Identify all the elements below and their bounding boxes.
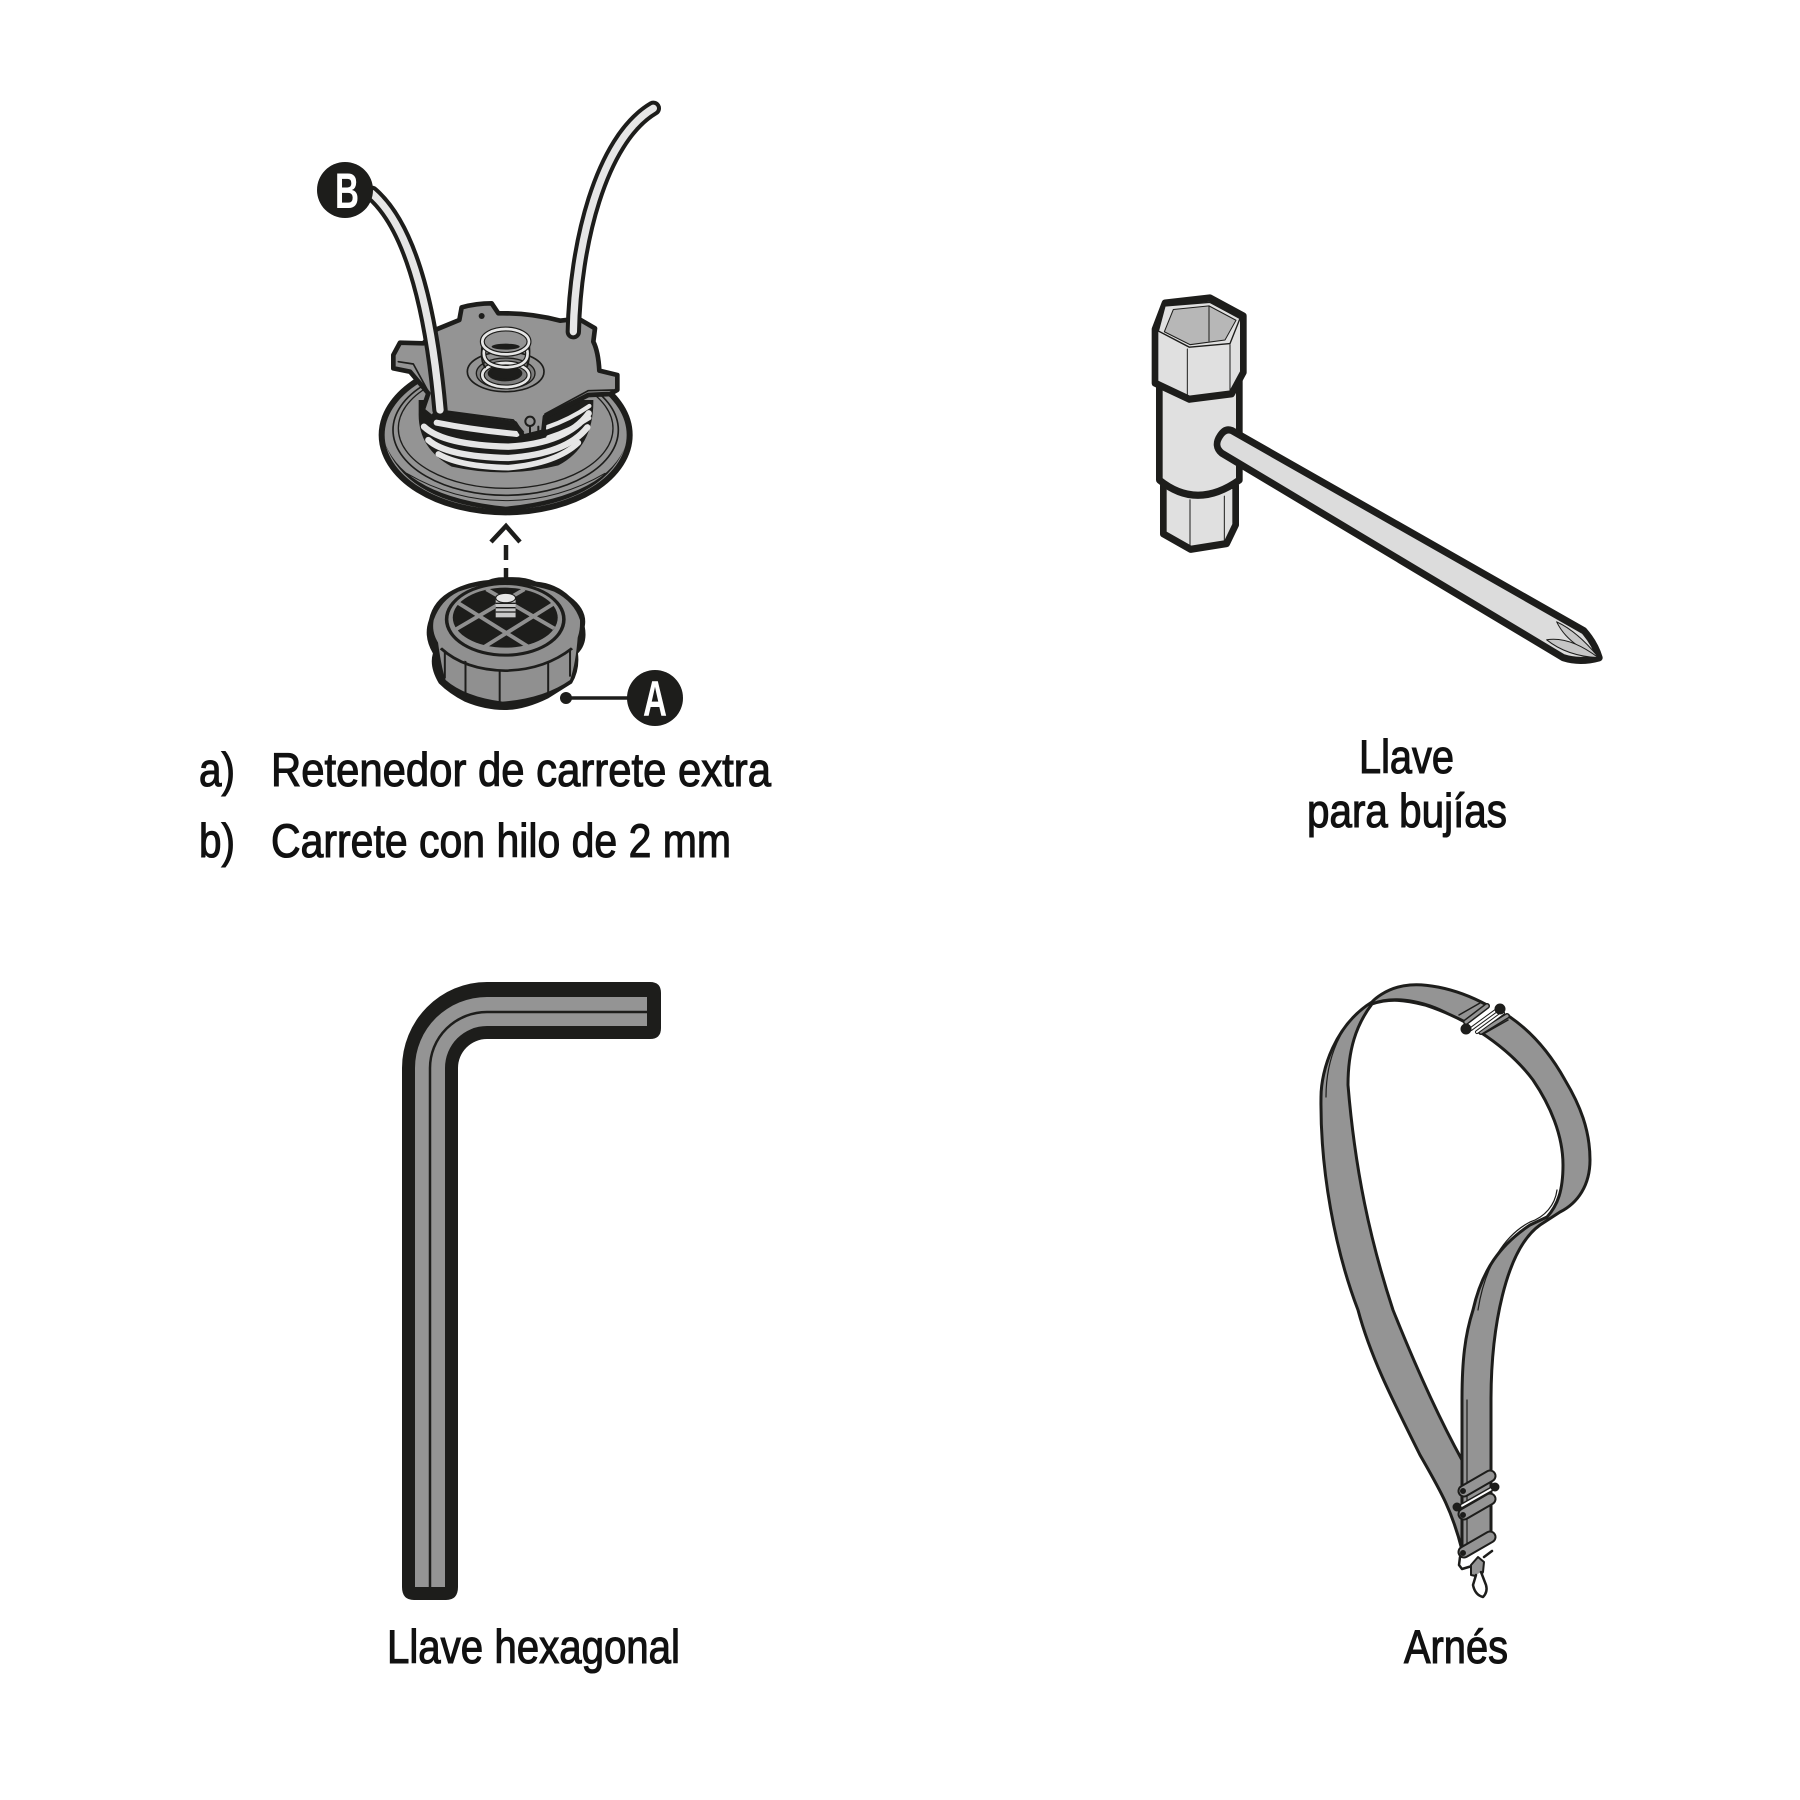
panel: trimmer spool accessory	[199, 108, 772, 867]
callout: A	[560, 670, 683, 727]
icon: spark plug wrench	[1155, 298, 1599, 660]
text: hex key caption: Llave hexagonal	[387, 1620, 680, 1673]
text: harness caption: Arnés	[1404, 1620, 1508, 1673]
callout: B: B	[335, 163, 359, 219]
text: item a: a)	[199, 743, 235, 796]
text: wrench caption	[1307, 730, 1507, 837]
text: item b: b)	[199, 814, 235, 867]
callout: B	[317, 162, 373, 219]
panel: harness	[1321, 985, 1590, 1673]
text: item b: Carrete con hilo de 2 mm	[271, 814, 731, 867]
icon: harness strap	[1321, 985, 1590, 1597]
text: item a: Retenedor de carrete extra	[271, 743, 772, 796]
callout: A: A	[643, 671, 667, 727]
text: wrench caption: para bujías	[1307, 784, 1507, 837]
icon: retainer knob	[427, 577, 586, 710]
arrow: dashed upward	[491, 526, 520, 578]
panel: spark plug wrench	[1155, 298, 1599, 837]
text: wrench caption: Llave	[1359, 730, 1454, 783]
icon: hex key	[402, 982, 661, 1600]
icon: spool with line	[372, 108, 653, 512]
panel: hex key	[387, 982, 680, 1673]
